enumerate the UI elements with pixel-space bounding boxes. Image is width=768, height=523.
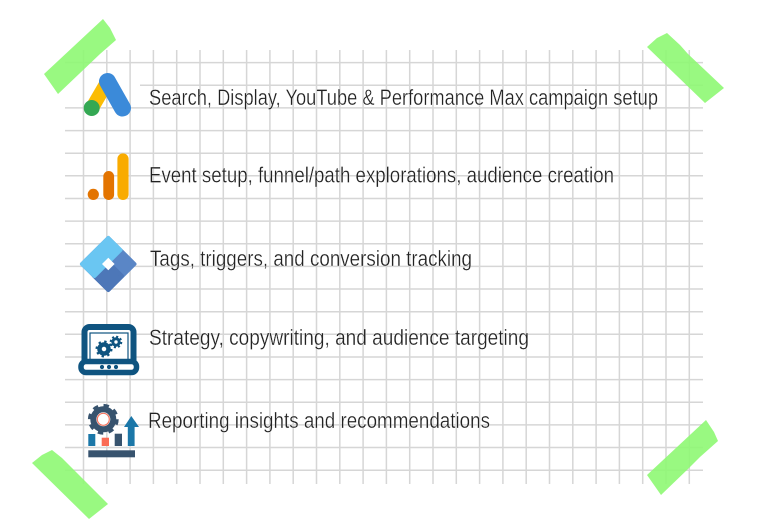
row 1: Google Ads: [84, 82, 658, 116]
row 2: Google Analytics: [88, 153, 614, 200]
icon: laptop with gears: [81, 327, 136, 372]
icon: Google Tag Manager logo: [82, 238, 134, 290]
row 5: reporting: [88, 406, 490, 457]
text: tag manager: Tags, triggers, and conversion tracking: [150, 246, 472, 271]
text: campaign setup: Search, Display, YouTube & Performance Max campaign setup: [149, 85, 658, 110]
text: analytics: Event setup, funnel/path explorations, audience creation: [149, 162, 614, 188]
row 4: strategy: [81, 325, 529, 372]
tape: bottom right: [647, 420, 718, 495]
text: strategy: Strategy, copywriting, and audience targeting: [149, 325, 529, 350]
icon: Google Ads logo: [84, 82, 122, 116]
row 3: Google Tag Manager: [82, 238, 472, 290]
icon: reporting gear and bar chart: [88, 406, 139, 457]
tape: bottom left: [32, 450, 108, 519]
tape: top left: [44, 19, 116, 94]
text: reporting: Reporting insights and recommendations: [148, 408, 490, 433]
tape: top right: [647, 33, 724, 103]
icon: Google Analytics logo: [88, 153, 129, 200]
